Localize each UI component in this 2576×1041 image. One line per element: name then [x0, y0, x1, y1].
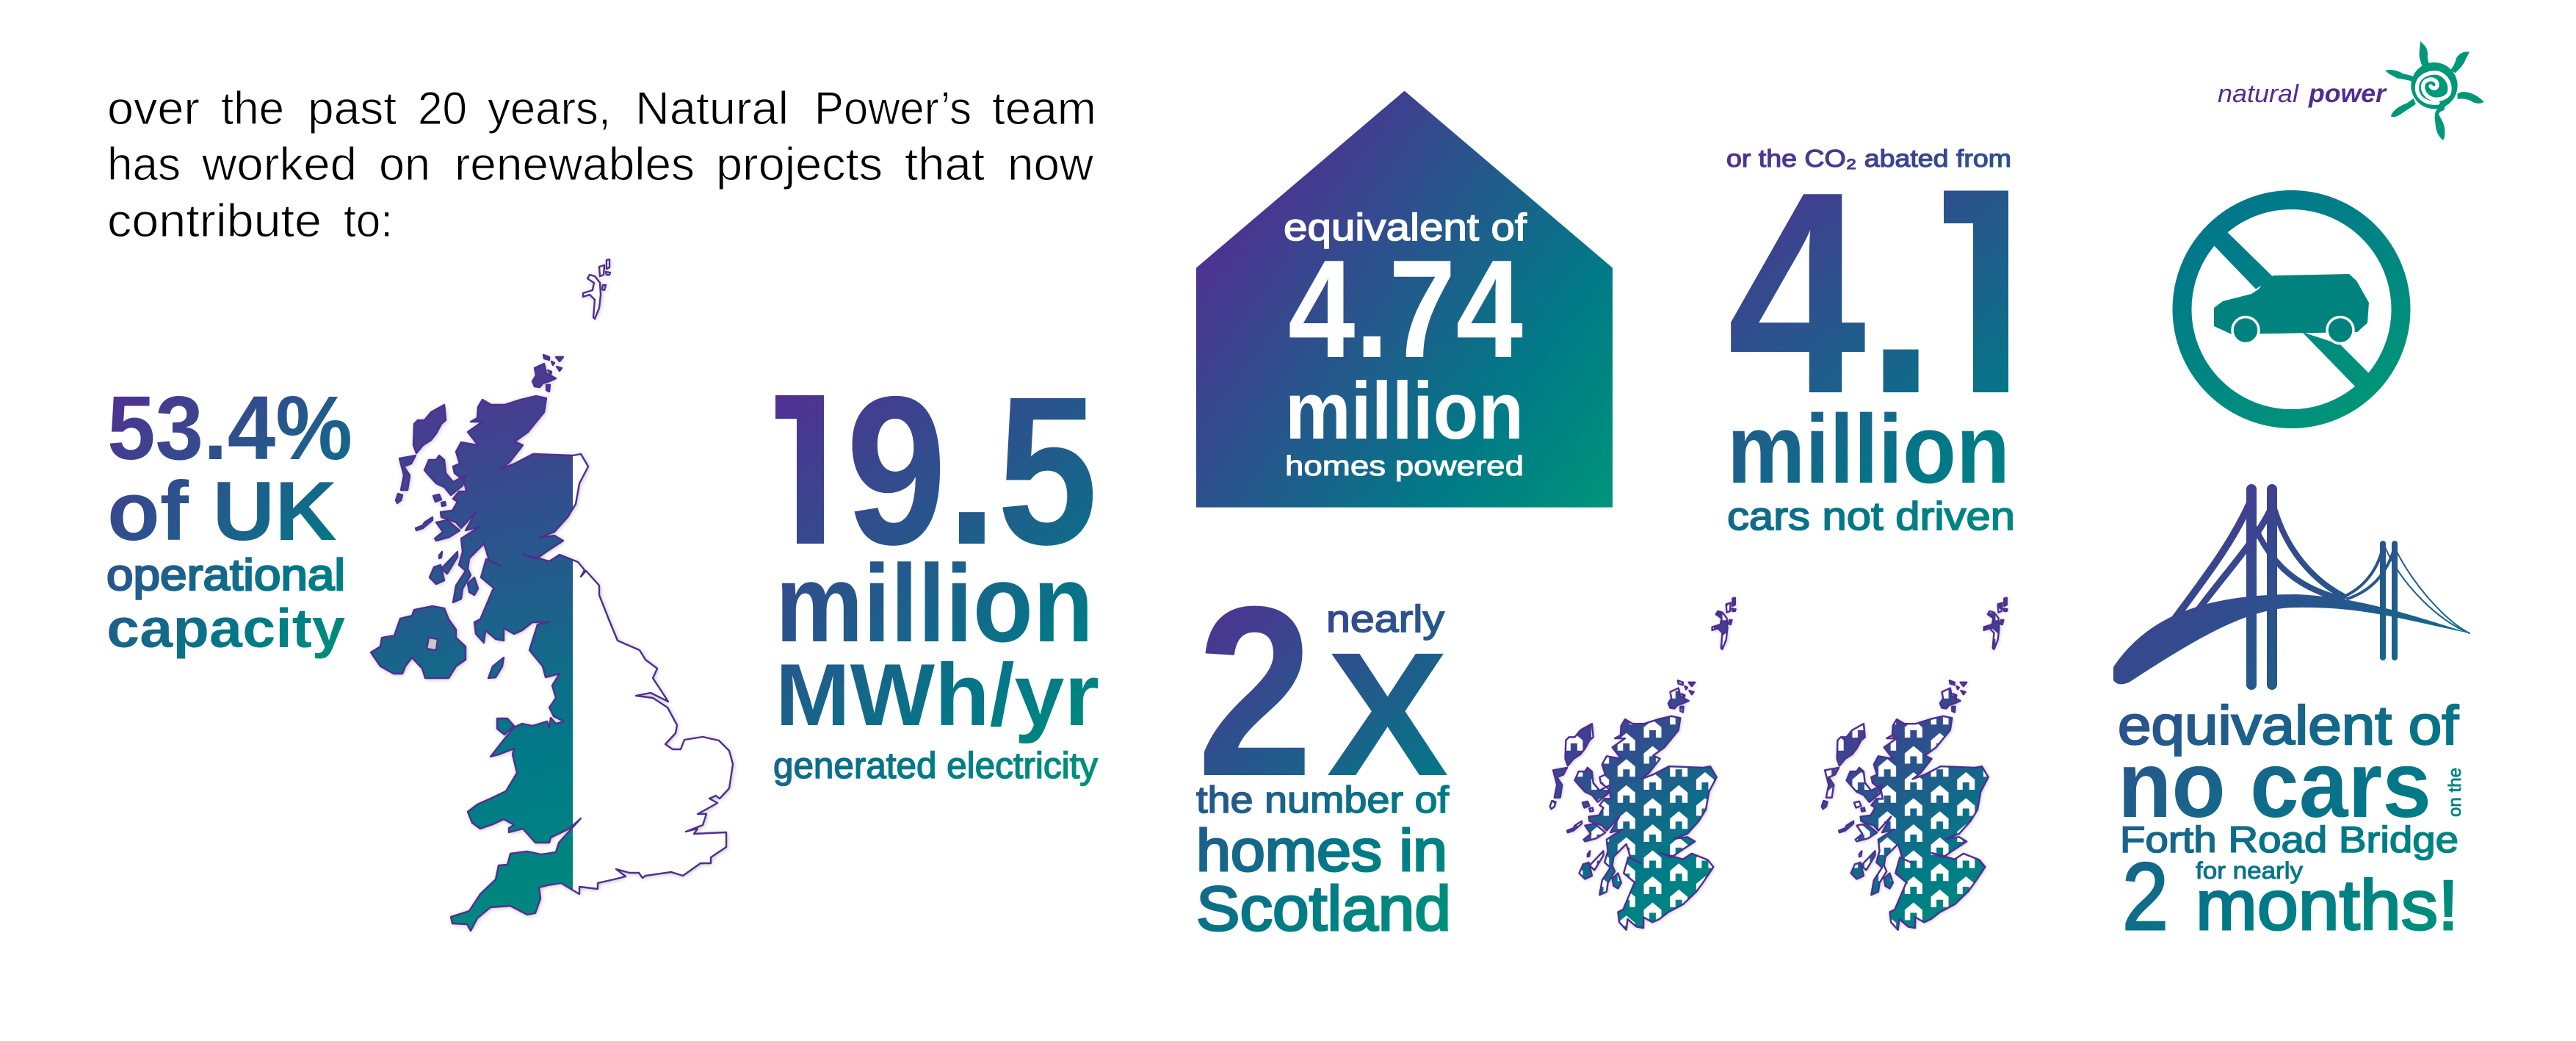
logo wordmark [2218, 79, 2387, 108]
stat: 19.5 million MWh/yr generated electricity: generated electricity [773, 745, 1098, 786]
map: unfilled outline base [371, 259, 733, 931]
house text: 4.74 [1288, 231, 1523, 387]
intro text: projects [716, 139, 883, 190]
stat: nearly 2X the number of homes in Scotland: nearly [1326, 598, 1444, 641]
stat: CO2 abated from 4.1 million cars not driven: 1 [1911, 132, 2058, 454]
text: equivalent of no cars on the Forth Road Bridge for nearly 2 months!: for nearly [2196, 857, 2303, 884]
intro text: years, [488, 83, 611, 134]
intro text: contribute [107, 195, 322, 247]
Scotland outline [1550, 598, 1736, 930]
slash [2210, 228, 2373, 391]
intro text: team [992, 83, 1096, 134]
intro text: now [1007, 139, 1094, 190]
stat: nearly 2X the number of homes in Scotland [1196, 555, 1451, 944]
intro text: worked [201, 139, 357, 190]
stat: nearly 2X the number of homes in Scotland: the number of [1196, 779, 1450, 821]
intro text: to: [344, 195, 393, 247]
stat: 53.4% of UK operational capacity: capacity [106, 597, 345, 659]
stat: CO2 abated from 4.1 million cars not driven: cars not driven [1727, 494, 2015, 538]
logo wordmark: power [2308, 79, 2387, 108]
map: gradient filled western portion [372, 356, 573, 929]
icon: Forth Road Bridge [2113, 489, 2470, 685]
text: equivalent of no cars on the Forth Road Bridge for nearly 2 months!: months! [2196, 866, 2459, 945]
stat: 19.5 million MWh/yr generated electricity: 1 [747, 353, 864, 589]
stat: 19.5 million MWh/yr generated electricity: MWh/yr [775, 646, 1099, 744]
stat: 19.5 million MWh/yr generated electricity [774, 395, 1099, 786]
house text [1284, 206, 1527, 482]
text: equivalent of no cars on the Forth Road Bridge for nearly 2 months! [2118, 695, 2465, 950]
text: equivalent of no cars on the Forth Road Bridge for nearly 2 months!: equivalent of [2118, 695, 2459, 756]
towers [2166, 489, 2470, 685]
logo wordmark: natural [2218, 80, 2300, 108]
stat: 53.4% of UK operational capacity: operational [106, 550, 345, 599]
cables [2166, 500, 2251, 630]
intro text [107, 83, 1096, 247]
panel: house 4.74 million homes powered [1196, 91, 1613, 508]
map: Scotland with houses (right) [1820, 597, 2010, 932]
house pattern [1551, 604, 1730, 926]
stat: CO2 abated from 4.1 million cars not driven: or the CO₂ abated from [1726, 145, 2011, 172]
logo sun [2385, 41, 2484, 140]
Scotland outline [1822, 598, 2008, 930]
intro text: Power’s [814, 83, 972, 134]
house shape [1196, 91, 1613, 508]
house pattern [1826, 608, 2001, 927]
house text: equivalent of [1284, 206, 1527, 249]
logo: natural power [2218, 41, 2484, 140]
map: coastline stroke [371, 259, 733, 931]
stat: 53.4% of UK operational capacity: of UK [107, 465, 337, 558]
stat: CO2 abated from 4.1 million cars not driven [1727, 148, 2014, 530]
map: Scotland with houses (left) [1549, 597, 1738, 932]
stat: CO2 abated from 4.1 million cars not driven: million [1727, 395, 2010, 504]
text: equivalent of no cars on the Forth Road Bridge for nearly 2 months!: no cars [2118, 732, 2431, 838]
intro text: 20 [418, 83, 467, 134]
text: equivalent of no cars on the Forth Road Bridge for nearly 2 months!: 2 [2122, 843, 2168, 950]
intro text: the [221, 83, 284, 134]
intro text: has [107, 139, 181, 190]
intro text: renewables [455, 139, 695, 190]
house text: million [1285, 366, 1524, 456]
deck [2113, 594, 2470, 684]
map: Lough Neagh [427, 638, 438, 650]
stat: 19.5 million MWh/yr generated electricity: 9.5 [846, 353, 1098, 589]
intro text: past [308, 83, 397, 134]
Scotland fill [1822, 598, 2008, 930]
Scotland fill [1550, 598, 1736, 930]
stat: CO2 abated from 4.1 million cars not driven: 4. [1727, 132, 1936, 454]
intro text: that [905, 139, 985, 190]
stat: 19.5 million MWh/yr generated electricity: million [775, 541, 1093, 665]
icon: no cars sign [2182, 200, 2401, 419]
stat: nearly 2X the number of homes in Scotland: 2 [1197, 555, 1313, 826]
text: equivalent of no cars on the Forth Road Bridge for nearly 2 months!: Forth Road Bridge [2120, 819, 2459, 860]
stat: nearly 2X the number of homes in Scotland: X [1326, 616, 1449, 813]
intro text: Natural [635, 83, 789, 134]
UK map half filled [371, 259, 733, 931]
stat: nearly 2X the number of homes in Scotland: homes in [1196, 818, 1447, 883]
house text: homes powered [1285, 451, 1524, 482]
text: equivalent of no cars on the Forth Road Bridge for nearly 2 months!: on the [2445, 768, 2465, 817]
ring [2182, 200, 2401, 419]
stat: nearly 2X the number of homes in Scotland: Scotland [1196, 874, 1451, 944]
wheels [2232, 317, 2354, 344]
stat: 53.4% of UK operational capacity: 53.4% [107, 378, 352, 479]
intro text: on [379, 139, 430, 190]
car [2214, 274, 2369, 334]
intro text: over [107, 83, 200, 134]
stat: 53.4% of UK operational capacity [106, 378, 352, 659]
